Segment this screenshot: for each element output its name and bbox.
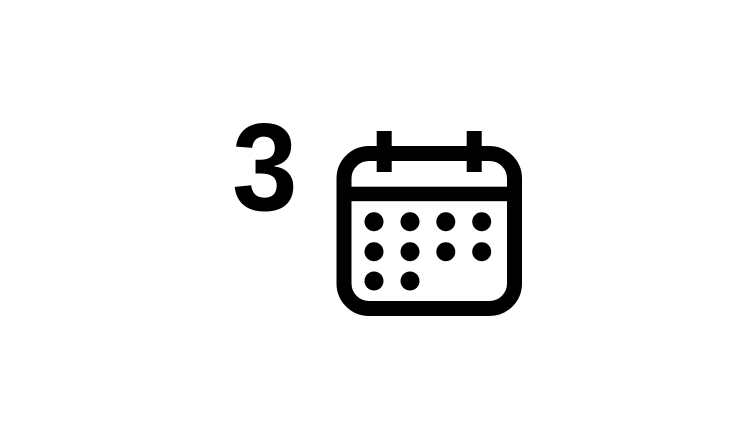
number three: 3 bbox=[232, 98, 298, 237]
icon: calendar bbox=[340, 131, 518, 308]
